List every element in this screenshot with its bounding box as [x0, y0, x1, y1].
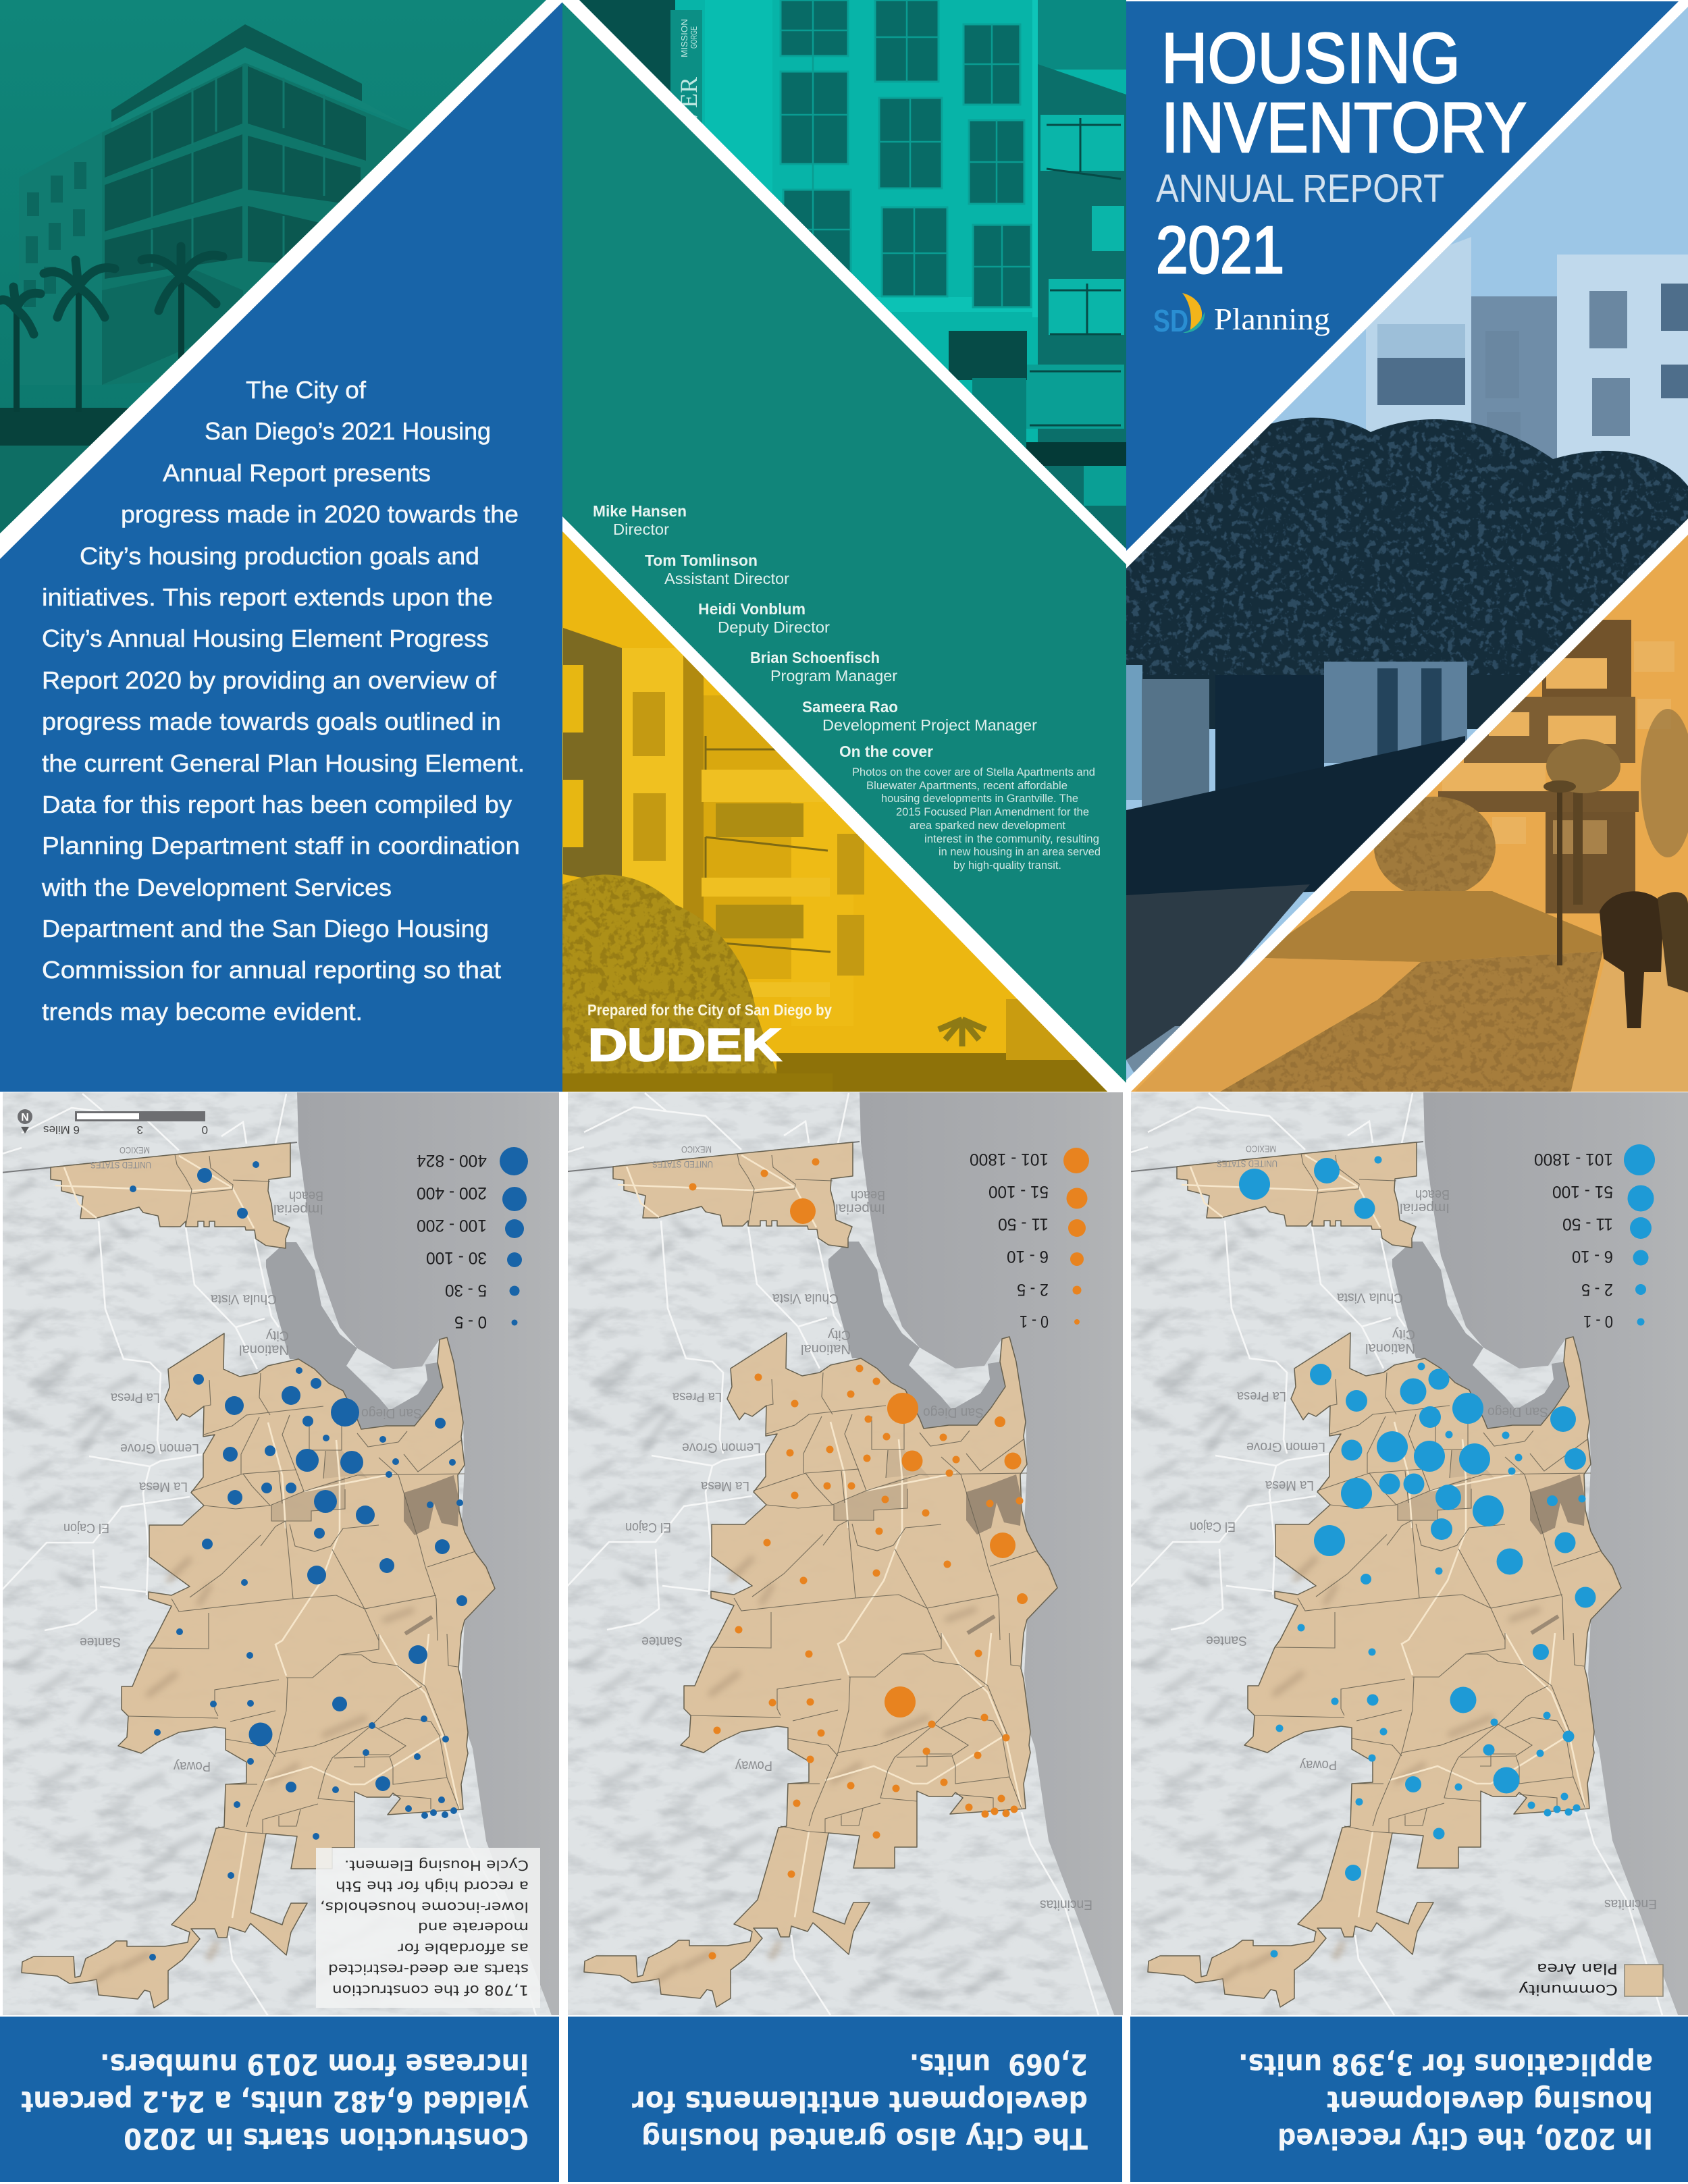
banner: development applications [1130, 2017, 1688, 2182]
banner: development entitlements: 2,069 units. [909, 2047, 1088, 2081]
title: HOUSING [1161, 19, 1460, 98]
map place labels: UNITED STATES [90, 1160, 151, 1171]
map place labels: Beach [1415, 1187, 1450, 1202]
legend: unit ranges: 5 - 30 [445, 1281, 487, 1300]
sign lettering [681, 20, 697, 117]
title: ANNUAL REPORT [1156, 167, 1444, 211]
map place labels: Chula Vista [210, 1291, 277, 1306]
scale bar: 6 Miles [43, 1123, 80, 1136]
map place labels: Chula Vista [1336, 1290, 1403, 1305]
map place labels: Santee [641, 1634, 683, 1649]
panel: teal credits block [562, 3, 1126, 1083]
callout: deed-restricted starts: Cycle Housing Element. [344, 1857, 529, 1873]
icon: SD Planning logo: Planning [1214, 302, 1330, 336]
map place labels: Lemon Grove [682, 1440, 761, 1455]
map place labels: San Diego [1487, 1404, 1548, 1419]
legend: unit ranges [970, 1148, 1089, 1331]
callout: deed-restricted starts: 1,708 of the construction [332, 1982, 529, 1998]
text block: intro paragraph: City’s housing production goals and [80, 542, 479, 570]
map place labels: La Presa [672, 1389, 722, 1404]
text block: on the cover: in new housing in an area served [939, 845, 1101, 858]
scale bar: 0 [202, 1123, 208, 1136]
text block: on the cover: Bluewater Apartments, recent affordable [866, 779, 1067, 792]
text block: on the cover [839, 743, 1101, 872]
map place labels: City [266, 1328, 289, 1343]
legend: community plan area: Community [1519, 1981, 1618, 1998]
credits: staff names: Sameera Rao [802, 698, 898, 716]
text block: intro paragraph: The City of [246, 376, 367, 404]
map place labels: Santee [1206, 1633, 1247, 1648]
legend: unit ranges: 2 - 5 [1581, 1280, 1613, 1299]
map place labels: El Cajon [1190, 1519, 1236, 1534]
text block: intro paragraph: Report 2020 by providing an overview of [42, 666, 497, 694]
sign lettering: GORGE [689, 26, 699, 49]
text block: intro paragraph: progress made towards goals outlined in [42, 708, 501, 735]
legend: unit ranges: 11 - 50 [998, 1215, 1049, 1233]
banner: development entitlements [568, 2017, 1122, 2182]
map place labels: Imperial [1400, 1200, 1450, 1215]
legend: community plan area: Plan Area [1537, 1961, 1618, 1977]
credits: staff names: Mike Hansen [593, 502, 687, 520]
icon: SD Planning logo [1153, 293, 1330, 338]
map place labels: Encinitas [1604, 1896, 1657, 1911]
icon: SD Planning logo: SD [1153, 303, 1188, 338]
banner: development entitlements: development entitlements for [631, 2084, 1088, 2118]
scale bar [43, 1111, 208, 1136]
map place labels: La Presa [1236, 1389, 1286, 1404]
callout: deed-restricted starts: starts are deed-restricted [328, 1961, 529, 1977]
banner: construction starts [0, 2017, 559, 2182]
panel: yellow building photo [562, 527, 1116, 1094]
legend: unit ranges: 100 - 200 [417, 1216, 487, 1235]
credit: prepared by Dudek [587, 1001, 832, 1071]
sign lettering: VER [675, 77, 702, 126]
map place labels: MEXICO [681, 1144, 712, 1155]
callout: deed-restricted starts [316, 1848, 540, 2008]
map place labels: La Presa [110, 1390, 160, 1405]
panel: teal building photo [0, 0, 554, 540]
panel: title block on blue [1126, 1, 1679, 551]
text block: on the cover: area sparked new development [909, 819, 1065, 832]
credits: staff names: Assistant Director [664, 570, 789, 587]
text block: on the cover: housing developments in Grantville. The [881, 792, 1078, 805]
map place labels: San Diego [923, 1405, 984, 1420]
legend: unit ranges [417, 1147, 528, 1331]
panel: intro text on blue [0, 2, 562, 1092]
map place labels: Lemon Grove [1246, 1439, 1325, 1454]
icon: north arrow: N [21, 1112, 29, 1123]
panel: blue apartment photo [1126, 0, 1688, 1087]
panel: orange apartment photo [1131, 533, 1688, 1094]
legend: unit ranges: 51 - 100 [988, 1182, 1049, 1201]
callout: deed-restricted starts: as affordable for [397, 1940, 529, 1956]
text block: intro paragraph: Department and the San Diego Housing [42, 915, 489, 942]
legend: unit ranges: 11 - 50 [1562, 1215, 1613, 1233]
banner: construction starts: Construction starts in 2020 [124, 2121, 529, 2155]
map place labels [63, 1145, 422, 1774]
text block: on the cover: by high-quality transit. [953, 859, 1061, 872]
map place labels: Poway [174, 1759, 211, 1774]
data points: applications [1239, 1156, 1596, 1958]
map place labels: MEXICO [1246, 1144, 1276, 1154]
legend: unit ranges: 400 - 824 [417, 1151, 487, 1170]
map place labels: El Cajon [63, 1520, 109, 1535]
map place labels: Santee [80, 1634, 121, 1649]
credits: staff names: Director [613, 521, 669, 538]
map place labels [625, 1144, 1092, 1912]
map place labels: La Mesa [138, 1479, 188, 1494]
text block: intro paragraph: Commission for annual reporting so that [42, 956, 501, 984]
legend: unit ranges: 0 - 1 [1583, 1312, 1613, 1331]
legend: unit ranges: 0 - 5 [454, 1312, 487, 1331]
banner: development applications: In 2020, the City received [1277, 2121, 1653, 2155]
legend: unit ranges [1534, 1144, 1655, 1331]
scale bar: 3 [137, 1123, 143, 1136]
text block: on the cover: On the cover [839, 743, 933, 760]
text block: intro paragraph [41, 376, 525, 1026]
map place labels: San Diego [361, 1406, 422, 1420]
banner: development applications: applications for 3,398 units. [1238, 2047, 1653, 2081]
map place labels: City [828, 1327, 851, 1342]
text block: intro paragraph: trends may become evident. [42, 998, 363, 1026]
map panel: development applications [1126, 1092, 1688, 2182]
banner: development applications: housing development [1327, 2084, 1653, 2118]
map place labels: La Mesa [1265, 1478, 1314, 1493]
banner: development entitlements: The City also granted housing [641, 2121, 1088, 2155]
map place labels: Lemon Grove [120, 1441, 199, 1456]
text block: intro paragraph: initiatives. This report extends upon the [42, 583, 493, 611]
title: 2021 [1156, 213, 1284, 287]
credit: prepared by Dudek: DUDEK [588, 1019, 781, 1071]
text block: on the cover: Photos on the cover are of Stella Apartments and [852, 766, 1095, 778]
text block: intro paragraph: the current General Plan Housing Element. [42, 749, 525, 777]
credits: staff names: Tom Tomlinson [645, 552, 758, 569]
text block: intro paragraph: progress made in 2020 towards the [121, 500, 519, 528]
legend: unit ranges: 101 - 1800 [1534, 1150, 1613, 1169]
title: INVENTORY [1161, 88, 1527, 167]
legend: unit ranges: 6 - 10 [1572, 1247, 1613, 1266]
map place labels: National [239, 1342, 289, 1357]
text block: intro paragraph: San Diego’s 2021 Housing [205, 417, 491, 445]
text block: intro paragraph: Annual Report presents [163, 459, 431, 487]
legend: unit ranges: 30 - 100 [426, 1248, 487, 1267]
sign lettering: MISSION [679, 19, 689, 57]
map place labels: Imperial [835, 1201, 885, 1216]
legend: unit ranges: 6 - 10 [1007, 1247, 1049, 1266]
callout: deed-restricted starts: a record high for the 5th [336, 1878, 529, 1894]
title [1156, 19, 1527, 287]
map place labels: Beach [851, 1188, 885, 1202]
icon: north arrow [18, 1109, 32, 1134]
credits: staff names: Program Manager [770, 667, 897, 685]
legend: community plan area [1519, 1961, 1663, 1998]
legend: unit ranges: 51 - 100 [1552, 1182, 1613, 1201]
text block: on the cover: 2015 Focused Plan Amendment for the [896, 805, 1089, 818]
data points: construction starts [130, 1161, 467, 1961]
map place labels: City [1392, 1327, 1415, 1341]
text block: intro paragraph: Planning Department staff in coordination [42, 832, 520, 859]
map place labels: UNITED STATES [652, 1159, 713, 1170]
map place labels: Poway [735, 1758, 772, 1773]
callout: deed-restricted starts: lower-income households, [320, 1899, 529, 1915]
credits: staff names: Development Project Manager [822, 716, 1037, 734]
map place labels: Beach [289, 1188, 323, 1203]
legend: unit ranges: 101 - 1800 [970, 1150, 1049, 1169]
legend: unit ranges: 2 - 5 [1017, 1280, 1049, 1299]
text block: intro paragraph: Data for this report has been compiled by [42, 791, 512, 818]
banner: construction starts: increase from 2019 numbers. [100, 2047, 529, 2081]
panel: cyan building photo [574, 0, 1128, 554]
map place labels: El Cajon [625, 1520, 671, 1535]
map place labels: National [1365, 1341, 1415, 1356]
credits: staff names [593, 502, 1037, 734]
text block: intro paragraph: with the Development Services [41, 874, 392, 901]
map place labels: Poway [1300, 1757, 1337, 1772]
credit: prepared by Dudek: Prepared for the City of San Diego by [587, 1001, 832, 1019]
map place labels: National [801, 1341, 851, 1356]
map place labels: MEXICO [120, 1145, 150, 1156]
legend: unit ranges: 200 - 400 [417, 1183, 487, 1202]
map place labels: UNITED STATES [1217, 1158, 1277, 1169]
map place labels: Imperial [273, 1202, 323, 1217]
map place labels: La Mesa [700, 1479, 749, 1493]
text block: on the cover: interest in the community, resulting [924, 832, 1099, 845]
credits: staff names: Deputy Director [718, 618, 830, 636]
map panel: development entitlements [562, 1092, 1130, 2182]
callout: deed-restricted starts: moderate and [418, 1919, 529, 1936]
map place labels: Chula Vista [772, 1291, 839, 1306]
text block: intro paragraph: City’s Annual Housing Element Progress [42, 624, 489, 652]
legend: unit ranges: 0 - 1 [1020, 1312, 1049, 1331]
map place labels [1190, 1144, 1657, 1911]
credits: staff names: Brian Schoenfisch [750, 649, 880, 666]
credits: staff names: Heidi Vonblum [698, 600, 806, 618]
map panel: construction starts [0, 1092, 567, 2182]
data points: entitlements [689, 1158, 1028, 1959]
map place labels: Encinitas [1040, 1897, 1092, 1912]
